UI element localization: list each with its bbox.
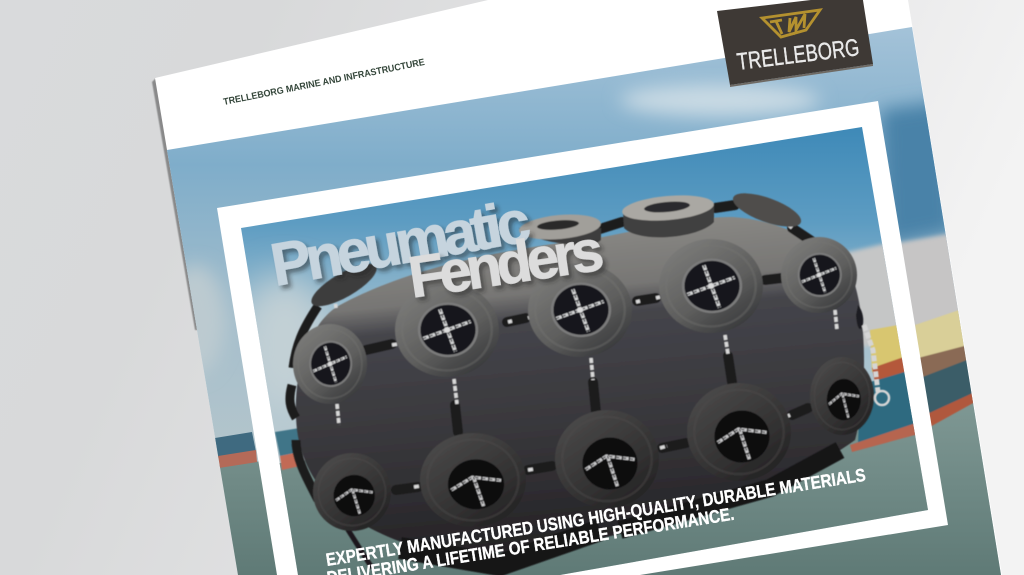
side straps	[290, 306, 318, 500]
end chain and hook	[864, 325, 889, 405]
grey cloud band at right	[901, 232, 962, 336]
connector straps	[366, 205, 816, 490]
connector chains	[334, 220, 837, 487]
caption line 1: EXPERTLY MANUFACTURED USING HIGH-QUALITY, DURABLE MATERIALS	[324, 465, 867, 570]
logo wordmark: TRELLEBORG	[735, 34, 861, 76]
caption text	[324, 465, 867, 575]
inner photo panel	[230, 120, 940, 575]
ship right	[915, 310, 974, 426]
ship	[275, 322, 926, 470]
pneumatic fender	[287, 186, 889, 568]
inner sky	[230, 120, 940, 575]
dark blue cloud band at right	[880, 100, 955, 246]
upper tire row	[287, 231, 863, 410]
logo	[717, 0, 873, 87]
logo plate	[717, 0, 873, 85]
distant ship left	[215, 432, 257, 468]
grey cloud band	[848, 242, 898, 348]
white frame panel	[217, 101, 948, 575]
logo mark	[762, 10, 820, 37]
rubber body	[296, 217, 864, 553]
inner sea	[280, 400, 928, 575]
lower tire row	[307, 351, 879, 537]
top tires	[306, 186, 805, 314]
page shadow	[152, 78, 200, 330]
title: Pneumatic: Pneumatic	[266, 187, 535, 299]
title: Fenders: Fenders	[404, 218, 608, 311]
header text: TRELLEBORG MARINE AND INFRASTRUCTURE	[222, 57, 426, 108]
